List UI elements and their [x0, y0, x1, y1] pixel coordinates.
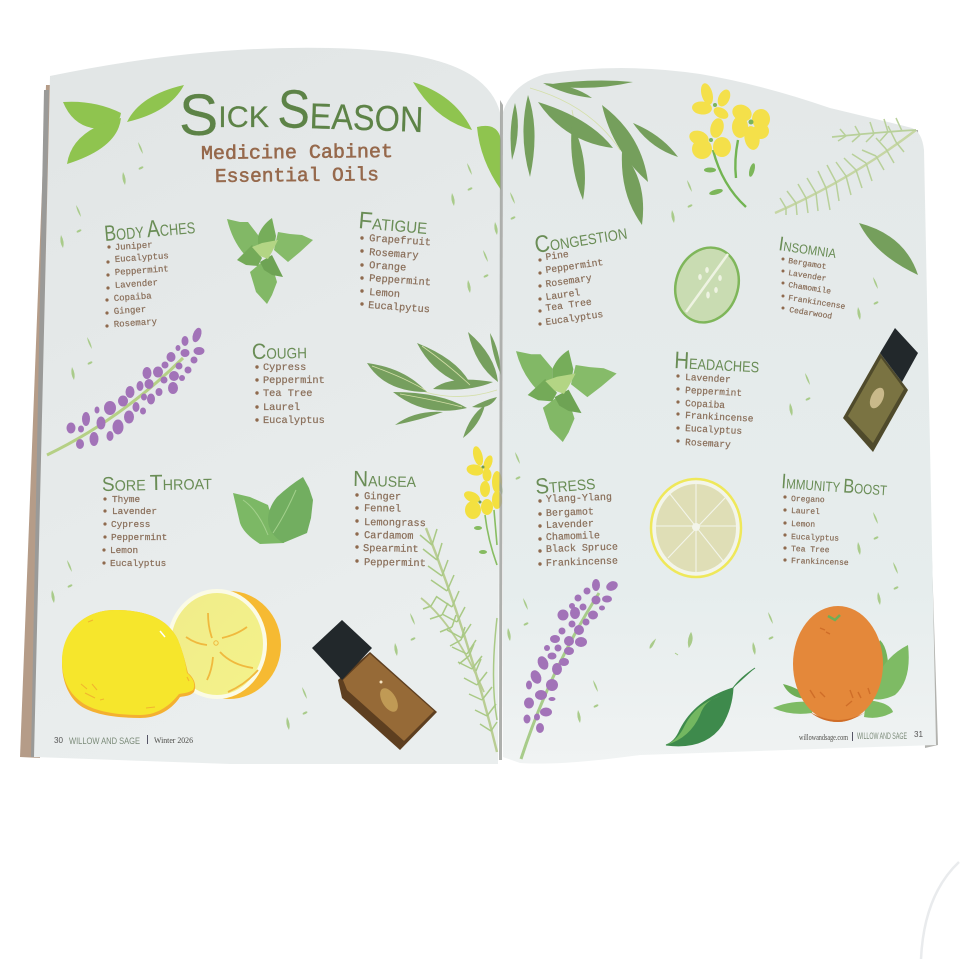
icon: lavender sprig left — [47, 327, 204, 455]
icon: whole lemon — [62, 610, 195, 718]
list: insomnia: Cedarwood — [789, 306, 833, 322]
list: headaches: Rosemary — [685, 437, 731, 450]
panel: right page — [494, 68, 936, 764]
heading: stress: STRESS — [534, 469, 596, 499]
list: headaches: Lavender — [685, 372, 731, 385]
heading: congestion: CONGESTION — [533, 218, 629, 259]
icon: rosemary branch — [420, 528, 497, 752]
list: immunity boost: Eucalyptus — [791, 533, 839, 544]
list: body aches: Lavender — [115, 278, 158, 291]
heading: sore throat: SORE THROAT — [102, 469, 212, 496]
list: fatigue: Peppermint — [369, 273, 431, 289]
list: nausea: Peppermint — [364, 557, 426, 570]
list: stress: Lavender — [546, 518, 594, 532]
panel: left page — [34, 48, 502, 764]
list: fatigue: Grapefruit — [369, 233, 431, 249]
title: SEASON — [277, 79, 425, 144]
footer: right — [799, 730, 924, 742]
heading: nausea: NAUSEA — [353, 466, 416, 492]
list: immunity boost: Oregano — [791, 495, 825, 505]
list: sore throat: Eucalyptus — [110, 558, 166, 569]
list: sore throat: Cypress — [111, 519, 150, 530]
title: S — [179, 83, 218, 148]
heading: fatigue: FATIGUE — [357, 207, 429, 240]
icon: brown bottle — [312, 620, 437, 750]
icon: orange with leaves — [773, 606, 909, 722]
list: congestion: Peppermint — [545, 257, 604, 276]
list: congestion: Tea Tree — [545, 297, 593, 314]
list: immunity boost: Lemon — [791, 520, 815, 530]
list: insomnia — [777, 233, 846, 322]
list: sore throat: Peppermint — [111, 532, 167, 543]
icon: lavender sprig right — [521, 579, 619, 759]
list: congestion: Pine — [545, 249, 570, 263]
icon: yellow flowers left — [462, 445, 502, 565]
subtitle: Essential Oils — [215, 164, 379, 188]
icon: lemon slice — [167, 589, 281, 699]
icon: rosemary top right — [775, 118, 916, 215]
footer: right: WILLOW AND SAGE — [857, 731, 907, 741]
list: immunity boost — [781, 470, 888, 568]
icon: lime slice — [666, 239, 748, 331]
decoration: small leaf flecks left — [51, 142, 489, 730]
title — [179, 79, 425, 148]
icon: eucalyptus branch left — [367, 332, 501, 438]
icon: top right leaves — [413, 82, 501, 190]
decoration: glass bubble corner — [921, 862, 959, 959]
footer: left: 30 — [54, 736, 64, 745]
list: cough: Tea Tree — [263, 388, 312, 400]
heading: headaches: HEADACHES — [674, 347, 760, 378]
list: stress: Bergamot — [546, 507, 594, 520]
list: body aches: Eucalyptus — [115, 251, 169, 265]
list: insomnia: Bergamot — [788, 257, 827, 272]
list: cough: Eucalyptus — [263, 415, 325, 427]
list: body aches: Peppermint — [115, 264, 169, 278]
list: headaches — [674, 347, 760, 450]
list: congestion: Laurel — [545, 287, 581, 303]
icon: lemon slice right — [651, 479, 741, 577]
heading: body aches: BODY ACHES — [103, 212, 196, 247]
list: nausea: Cardamom — [364, 530, 414, 543]
icon: yellow flowers right — [687, 82, 770, 207]
list: fatigue: Lemon — [369, 287, 400, 301]
list: cough: Peppermint — [263, 375, 325, 387]
list: sore throat: Lavender — [112, 506, 157, 517]
footer: left: WILLOW AND SAGE — [69, 736, 140, 746]
list: immunity boost: Laurel — [791, 507, 820, 517]
list: fatigue — [357, 207, 431, 316]
footer: left — [54, 735, 193, 746]
book: page edges — [20, 85, 938, 758]
icon: green leaf — [666, 668, 755, 746]
footer: right: willowandsage.com — [799, 733, 849, 742]
list: body aches: Rosemary — [114, 317, 158, 330]
list: congestion: Eucalyptus — [545, 309, 604, 328]
list: stress — [534, 469, 618, 570]
list: insomnia: Frankincense — [788, 294, 846, 312]
title: ICK — [218, 101, 269, 134]
list: body aches: Copaiba — [114, 291, 153, 304]
list: cough: Cypress — [263, 362, 306, 374]
list: cough — [252, 338, 325, 427]
list: nausea: Fennel — [364, 503, 401, 516]
book spine shadow — [499, 100, 503, 760]
list: insomnia: Lavender — [788, 269, 827, 284]
heading: immunity boost: IMMUNITY BOOST — [781, 470, 888, 500]
list: nausea: Lemongrass — [364, 517, 426, 530]
list: headaches: Frankincense — [685, 410, 754, 425]
footer: left: Winter 2026 — [154, 736, 193, 745]
list: congestion: Rosemary — [545, 273, 593, 290]
list: fatigue: Rosemary — [369, 247, 419, 262]
list: headaches: Eucalyptus — [685, 423, 742, 437]
list: congestion — [533, 218, 629, 328]
list: immunity boost: Frankincense — [791, 557, 849, 568]
list: sore throat: Thyme — [112, 494, 141, 505]
list: fatigue: Eucalpytus — [368, 300, 430, 316]
icon: mint sprig — [227, 218, 313, 304]
decoration: small leaf flecks right — [494, 180, 899, 723]
icon: olive bottle — [843, 328, 918, 452]
icon: top left leaves — [63, 85, 184, 164]
list: nausea — [353, 466, 426, 570]
list: body aches — [103, 212, 196, 330]
list: stress: Chamomile — [546, 530, 600, 544]
list: nausea: Spearmint — [363, 543, 419, 556]
heading: cough: COUGH — [252, 338, 307, 364]
subtitle — [201, 141, 393, 188]
list: stress: Frankincense — [546, 555, 618, 570]
list: body aches: Ginger — [114, 305, 147, 317]
list: body aches: Juniper — [115, 240, 153, 253]
icon: eucalyptus leaf right — [859, 223, 918, 275]
subtitle: Medicine Cabinet — [201, 141, 393, 165]
list: immunity boost: Tea Tree — [791, 545, 830, 555]
icon: eucalyptus branch right — [511, 81, 678, 225]
list: headaches: Peppermint — [685, 385, 742, 399]
list: fatigue: Orange — [369, 260, 407, 275]
list: headaches: Copaiba — [685, 398, 726, 411]
list: sore throat: Lemon — [110, 545, 138, 556]
list: insomnia: Chamomile — [788, 281, 832, 297]
icon: basil leaves — [233, 477, 313, 544]
list: nausea: Ginger — [364, 491, 401, 504]
heading: insomnia: INSOMNIA — [777, 233, 838, 263]
list: sore throat — [102, 469, 212, 569]
footer: right: 31 — [914, 730, 924, 739]
list: stress: Black Spruce — [546, 541, 618, 556]
list: cough: Laurel — [263, 402, 300, 414]
icon: mint sprig right — [516, 350, 617, 442]
list: stress: Ylang-Ylang — [546, 492, 612, 506]
